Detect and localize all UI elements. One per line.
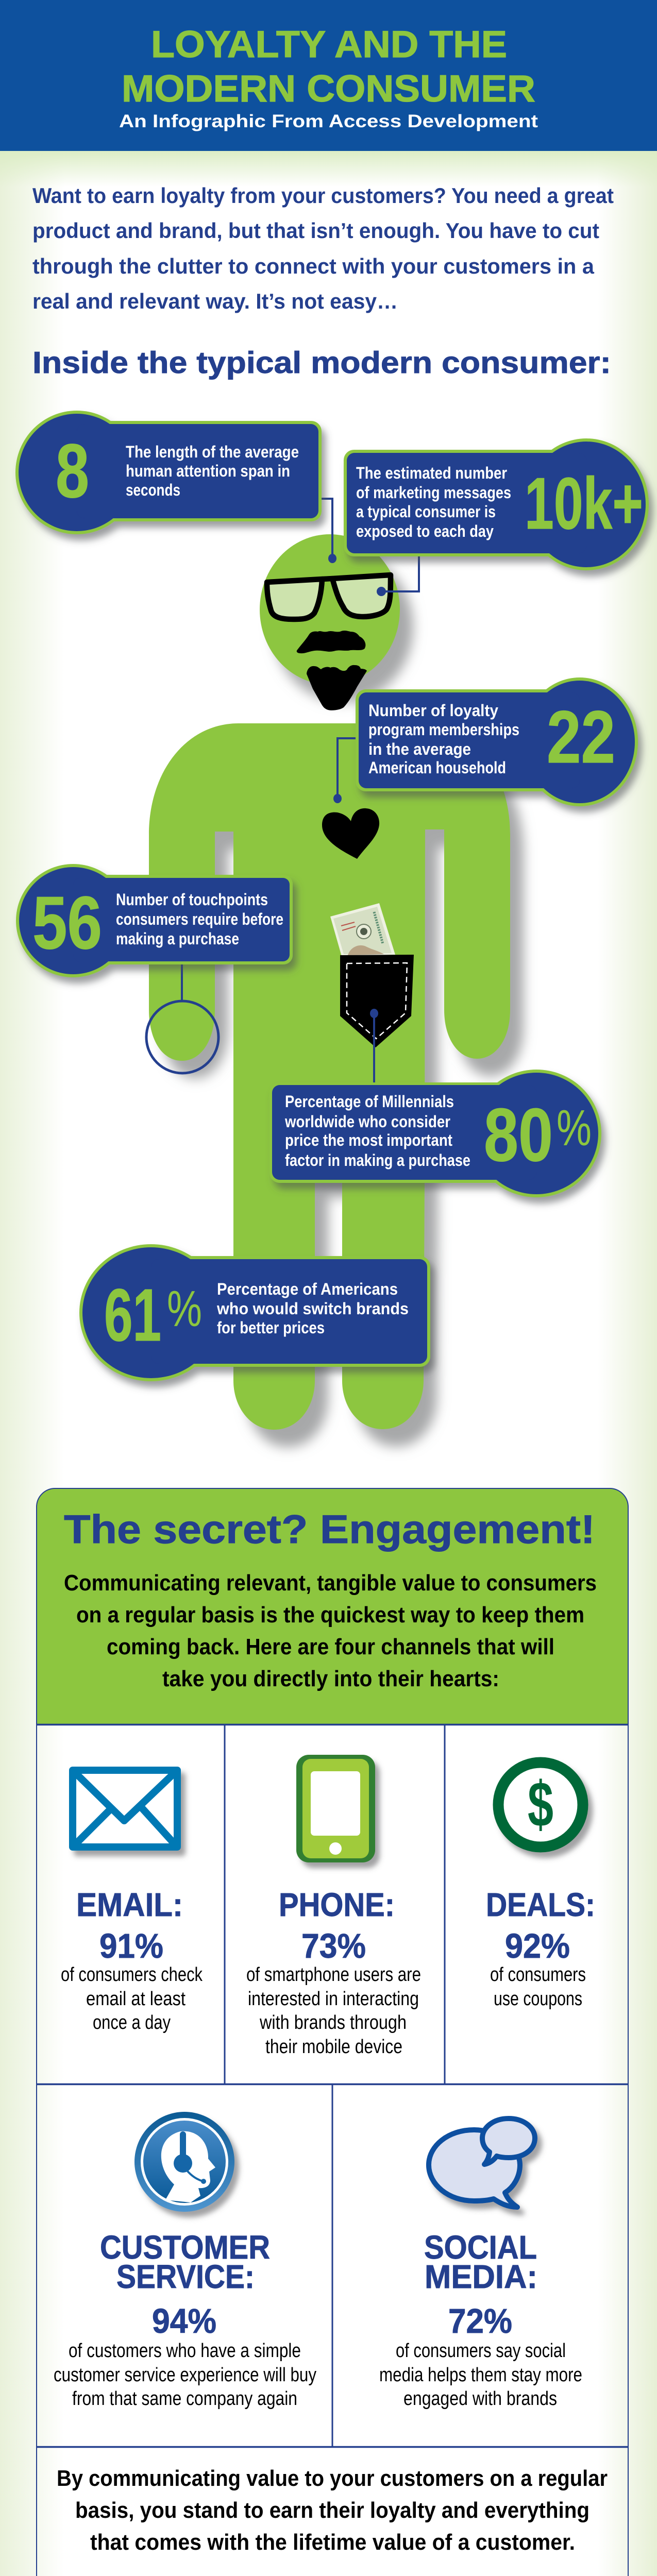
channel: social media (379, 2119, 582, 2410)
channel: social media: SOCIAL (424, 2229, 537, 2266)
callout: 8 seconds: The length of the average (126, 443, 299, 461)
channel: social media: of consumers say social (396, 2340, 566, 2362)
title: MODERN CONSUMER (122, 68, 535, 110)
channel: customer service: CUSTOMER (100, 2229, 270, 2266)
mustache (297, 631, 365, 653)
callout: 22 memberships: program memberships (368, 720, 519, 739)
callout: 10k+ messages: a typical consumer is (356, 502, 496, 521)
callout: 61% switchers: who would switch brands (216, 1299, 409, 1318)
channel: customer service: of customers who have a simple (69, 2340, 301, 2362)
intro paragraph: product and brand, but that isn’t enough. You have to cut (32, 218, 599, 243)
callout: 22 memberships (356, 677, 638, 806)
callout: 80% millennials: Percentage of Millennials (285, 1092, 454, 1111)
callout: 80% millennials (269, 1070, 601, 1197)
callout: 56 touchpoints: Number of touchpoints (116, 890, 268, 909)
section heading: inside the consumer: Inside the typical modern consumer: (32, 346, 611, 380)
channel: social media: MEDIA: (425, 2258, 537, 2295)
intro paragraph: through the clutter to connect with your customers in a (32, 254, 595, 278)
channel: email: of consumers check (61, 1964, 203, 1986)
channel: social media: engaged with brands (403, 2388, 557, 2410)
channel: phone: 73% (301, 1927, 366, 1965)
icon: dollar coin (498, 1762, 583, 1847)
callout: 80% millennials: % (557, 1099, 592, 1156)
callout: 56 touchpoints: making a purchase (116, 929, 239, 948)
callout: 10k+ messages: of marketing messages (356, 483, 511, 502)
icon: headset agent (134, 2112, 234, 2212)
intro paragraph: real and relevant way. It’s not easy… (32, 289, 398, 313)
channel: deals (486, 1762, 595, 2010)
callout: 80% millennials: 80 (484, 1093, 553, 1177)
closing statement: By communicating value to your customers on a regular (57, 2466, 608, 2491)
callout: 22 memberships: Number of loyalty (368, 701, 498, 720)
callout: 10k+ messages (344, 438, 649, 570)
closing statement: basis, you stand to earn their loyalty and everything (75, 2498, 589, 2523)
channel: customer service: 94% (152, 2302, 216, 2341)
callout: 22 memberships: in the average (368, 740, 471, 758)
callout: 22 memberships: 22 (547, 696, 615, 778)
callout: 10k+ messages: exposed to each day (356, 522, 494, 540)
panel intro text (64, 1570, 597, 1691)
channel: phone: with brands through (259, 2012, 407, 2033)
icon: envelope (73, 1770, 177, 1847)
callout: 8 seconds: 8 (56, 429, 89, 514)
callout: 10k+ messages: The estimated number (356, 464, 507, 482)
callout: 8 seconds (15, 411, 322, 534)
channel: email: EMAIL: (76, 1886, 183, 1923)
callout: 61% switchers (79, 1244, 430, 1381)
lower section: engagement panel, about and sources (36, 1488, 629, 2576)
channel: customer service (54, 2112, 316, 2410)
panel intro text: coming back. Here are four channels that will (107, 1634, 554, 1659)
panel intro text: take you directly into their hearts: (162, 1666, 499, 1691)
closing statement (57, 2466, 608, 2555)
channel: email (61, 1770, 203, 2033)
intro paragraph (32, 183, 614, 313)
upper section: header and consumer figure (0, 0, 657, 1454)
channel: deals: DEALS: (486, 1886, 595, 1923)
channel: customer service: from that same company again (72, 2388, 297, 2410)
channel: phone: PHONE: (279, 1886, 395, 1923)
callout: 8 seconds: seconds (126, 481, 180, 499)
icon: speech bubbles (429, 2119, 535, 2207)
panel intro text: on a regular basis is the quickest way to keep them (76, 1602, 584, 1628)
connector dots (328, 554, 386, 1018)
channel: email: email at least (86, 1988, 186, 2010)
channel: email: 91% (99, 1927, 163, 1965)
panel intro text: Communicating relevant, tangible value to consumers (64, 1570, 597, 1596)
subtitle: An Infographic From Access Development (119, 111, 538, 131)
pocket (340, 955, 414, 1047)
title: LOYALTY AND THE (151, 24, 507, 65)
money bill (330, 903, 395, 956)
figure body and head (149, 534, 510, 1430)
title (122, 24, 535, 110)
figure: green consumer silhouette (149, 534, 510, 1430)
panel: the secret engagement (37, 1488, 628, 1724)
panel heading: The secret? Engagement! (64, 1506, 595, 1552)
channel: customer service: customer service experience will buy (54, 2364, 316, 2386)
intro paragraph: Want to earn loyalty from your customers? You need a great (32, 183, 614, 208)
callout: 56 touchpoints: consumers require before (116, 910, 283, 928)
channel: deals: use coupons (494, 1988, 582, 2010)
hand ring (146, 1001, 218, 1073)
callout: 56 touchpoints: 56 (32, 881, 102, 964)
goatee (307, 665, 367, 710)
channel: deals: of consumers (490, 1964, 586, 1986)
channel: deals: 92% (505, 1927, 570, 1965)
channel: email: once a day (93, 2012, 171, 2033)
callout: 61% switchers: 61 (104, 1274, 161, 1357)
callout: 80% millennials: worldwide who consider (284, 1112, 450, 1131)
icon: smartphone (296, 1755, 375, 1862)
channel: phone: their mobile device (265, 2036, 402, 2058)
channel: social media: 72% (448, 2302, 512, 2341)
connector lines and dots (146, 499, 419, 1084)
callout: 8 seconds: human attention span in (126, 462, 290, 480)
channel: phone: interested in interacting (248, 1988, 419, 2010)
header banner (0, 0, 657, 151)
heart (322, 808, 379, 859)
callout: 61% switchers: Percentage of Americans (217, 1280, 398, 1298)
callout: 61% switchers: for better prices (217, 1318, 325, 1337)
callout: 80% millennials: factor in making a purchase (285, 1151, 470, 1170)
channel: customer service: SERVICE: (116, 2258, 255, 2295)
callout: 56 touchpoints (16, 864, 293, 977)
channel: social media: media helps them stay more (379, 2364, 582, 2386)
glasses (267, 575, 391, 619)
callout: 22 memberships: American household (368, 758, 506, 777)
channel: phone: of smartphone users are (246, 1964, 421, 1986)
icon: dollar coin: $ (528, 1769, 553, 1840)
channel: phone (246, 1755, 421, 2058)
callout: 61% switchers: % (167, 1280, 202, 1337)
closing statement: that comes with the lifetime value of a customer. (90, 2530, 575, 2555)
callout: 80% millennials: price the most important (285, 1131, 452, 1149)
